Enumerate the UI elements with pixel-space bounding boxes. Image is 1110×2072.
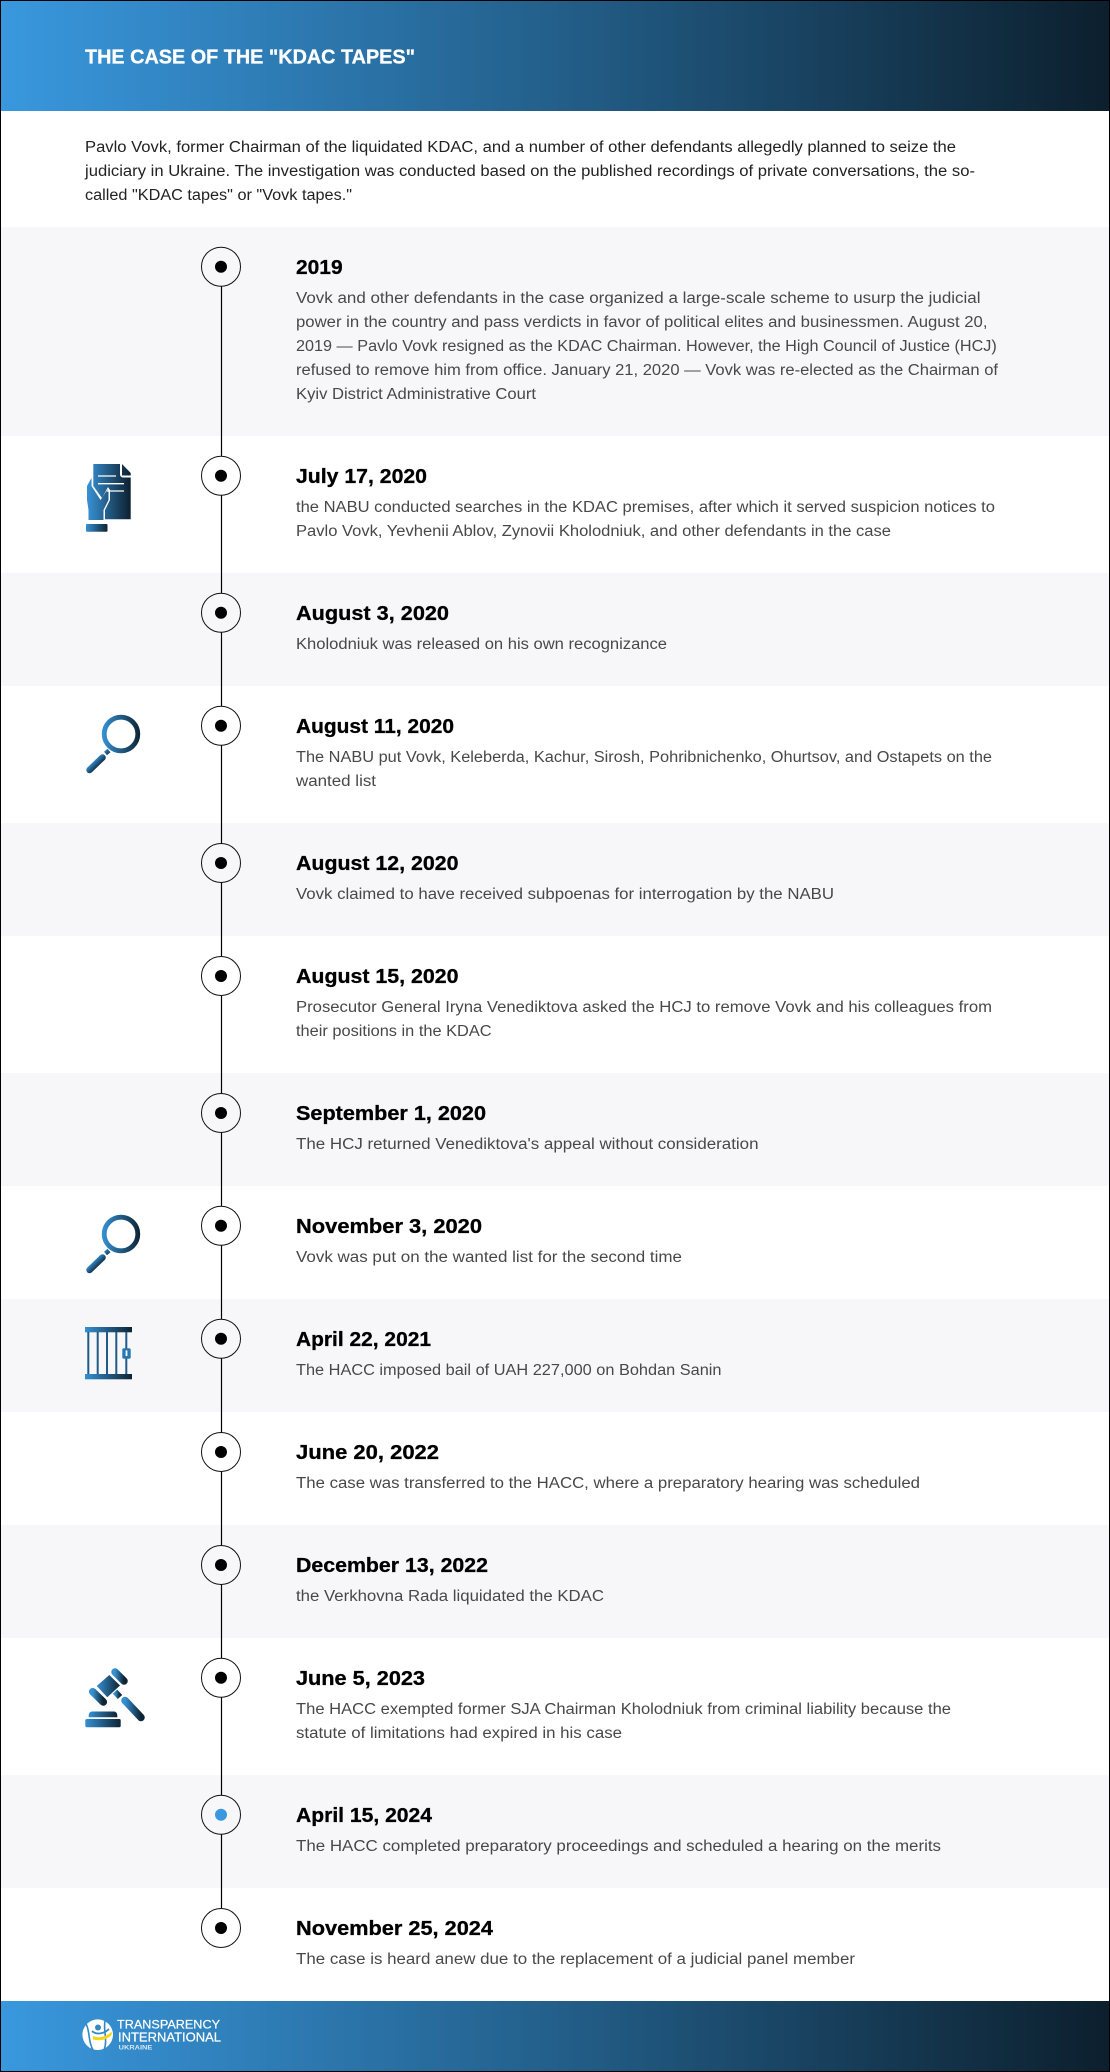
entry: April 15, 2024 [296,1805,941,1855]
icon: hand holding document [86,464,131,532]
icon: gavel [85,1672,141,1727]
entry: August 11, 2020 [295,716,992,790]
icon: prison bars [85,1327,132,1379]
logo: Transparency International Ukraine: INTERNATIONAL [118,2030,221,2044]
entry: November 3, 2020: November 3, 2020 [296,1216,482,1238]
entry: August 11, 2020: wanted list [295,773,377,790]
entry: August 15, 2020: their positions in the KDAC [296,1023,492,1040]
footer band [0,2001,1110,2072]
entry: April 22, 2021 [296,1329,722,1379]
entry: 2019 [296,257,999,403]
entry: 2019: refused to remove him from office. January 21, 2020 — Vovk was re-elected as the Chairman of [296,362,999,379]
entry: July 17, 2020 [296,466,995,540]
entry: December 13, 2022: the Verkhovna Rada liquidated the KDAC [296,1588,604,1605]
timeline nodes [202,247,240,1948]
header band [0,0,1110,111]
entry: August 3, 2020 [296,603,667,653]
entry: December 13, 2022: December 13, 2022 [296,1555,488,1577]
entry: April 22, 2021: The HACC imposed bail of UAH 227,000 on Bohdan Sanin [296,1362,722,1379]
timeline vertical line [220,267,222,1928]
entry: December 13, 2022 [296,1555,604,1605]
entry: August 15, 2020: Prosecutor General Iryna Venediktova asked the HCJ to remove Vovk and his colleagues from [296,999,992,1016]
entry: June 5, 2023: The HACC exempted former SJA Chairman Kholodniuk from criminal liability because the [296,1701,951,1718]
entry: 2019: 2019 — Pavlo Vovk resigned as the KDAC Chairman. However, the High Council of Justice (HCJ) [296,338,997,355]
entry: July 17, 2020: Pavlo Vovk, Yevhenii Ablov, Zynovii Kholodniuk, and other defendants in the case [296,523,891,540]
entry: November 25, 2024 [296,1918,855,1968]
logo: Transparency International Ukraine: TRANSPARENCY [117,2018,220,2032]
entry: June 5, 2023 [296,1668,951,1742]
entry: June 20, 2022: The case was transferred to the HACC, where a preparatory hearing was scheduled [296,1475,920,1492]
icon: magnifying glass [90,1217,138,1270]
logo: Transparency International Ukraine [82,2018,221,2052]
entry: April 15, 2024: The HACC completed preparatory proceedings and scheduled a hearing on the merits [296,1838,941,1855]
entry: August 12, 2020: Vovk claimed to have received subpoenas for interrogation by the NABU [296,886,834,903]
entry: September 1, 2020: The HCJ returned Venediktova's appeal without consideration [296,1136,758,1153]
entry: August 11, 2020: The NABU put Vovk, Keleberda, Kachur, Sirosh, Pohribnichenko, Ohurtsov, and Ostapets on the [296,749,992,766]
timeline node dots [215,261,227,1934]
intro text: Pavlo Vovk, former Chairman of the liquidated KDAC, and a number of other defendants allegedly planned to seize the [85,139,956,156]
entry: September 1, 2020 [296,1103,758,1153]
logo: Transparency International Ukraine: UKRAINE [119,2044,153,2052]
entry: April 22, 2021: April 22, 2021 [296,1329,431,1351]
logo globe [82,2019,113,2050]
entry: June 5, 2023: statute of limitations had expired in his case [296,1725,622,1742]
entry: August 12, 2020 [296,853,834,903]
entry: August 11, 2020: August 11, 2020 [296,716,454,738]
intro text [84,139,975,204]
entry: August 12, 2020: August 12, 2020 [296,853,458,875]
intro text: judiciary in Ukraine. The investigation was conducted based on the published recordings of private conversations, the so- [84,163,975,180]
entry: November 25, 2024: The case is heard anew due to the replacement of a judicial panel member [296,1951,855,1968]
title: THE CASE OF THE "KDAC TAPES" [85,46,415,68]
entry: 2019: 2019 [296,257,343,279]
entry: April 15, 2024: April 15, 2024 [296,1805,433,1827]
entry: November 3, 2020 [296,1216,682,1266]
entry: November 3, 2020: Vovk was put on the wanted list for the second time [296,1249,682,1266]
entry: August 15, 2020 [296,966,992,1040]
entry: August 15, 2020: August 15, 2020 [296,966,458,988]
icon: magnifying glass [90,717,138,770]
entry: November 25, 2024: November 25, 2024 [296,1918,494,1940]
entry: June 20, 2022 [296,1442,920,1492]
entry: July 17, 2020: the NABU conducted searches in the KDAC premises, after which it served suspicion notices to [296,499,995,516]
entry: September 1, 2020: September 1, 2020 [296,1103,486,1125]
entry: July 17, 2020: July 17, 2020 [296,466,427,488]
entry: June 20, 2022: June 20, 2022 [296,1442,439,1464]
entry: August 3, 2020: Kholodniuk was released on his own recognizance [296,636,667,653]
intro text: called "KDAC tapes" or "Vovk tapes." [85,187,352,204]
entry: 2019: Vovk and other defendants in the case organized a large-scale scheme to usurp the judicial [296,290,980,307]
entry: 2019: Kyiv District Administrative Court [296,386,537,403]
entry: 2019: power in the country and pass verdicts in favor of political elites and businessmen. August 20, [296,314,988,331]
entry: June 5, 2023: June 5, 2023 [296,1668,425,1690]
entry: August 3, 2020: August 3, 2020 [296,603,449,625]
